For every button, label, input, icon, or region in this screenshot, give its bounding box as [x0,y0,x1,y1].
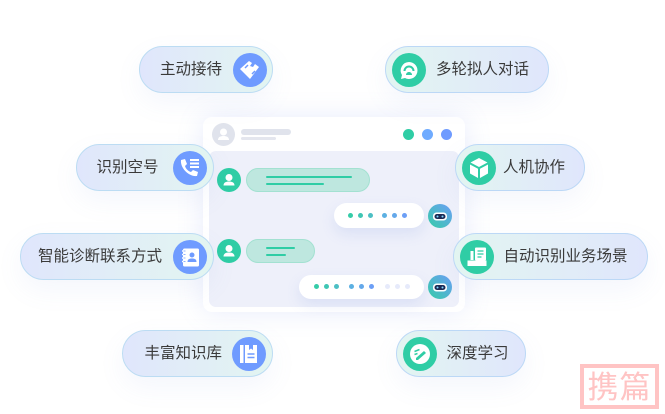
chat window [203,117,465,312]
label: 主动接待 [160,61,222,78]
label: 自动识别业务场景 [504,248,628,265]
pill: 多轮拟人对话 [385,46,549,92]
icon: ticket [233,53,267,87]
user bubble 1 [246,168,370,192]
icon: cube [462,151,496,185]
icon: chat agent [392,53,426,87]
user avatar 1 [217,168,241,192]
icon: notebook [232,337,266,371]
bot bubble 2 [299,274,424,299]
icon: document tray [460,240,494,274]
pill: 识别空号 [76,144,214,190]
pill: 深度学习 [396,330,526,376]
pill: 自动识别业务场景 [453,233,648,280]
stamp text: 携篇 [588,370,652,405]
chat panel [209,151,459,307]
label: 多轮拟人对话 [436,61,529,78]
pill: 人机协作 [455,144,585,190]
pill: 丰富知识库 [122,330,273,376]
header name lines [241,129,291,140]
label: 识别空号 [96,159,159,176]
label: 智能诊断联系方式 [38,248,162,265]
icon: phone list [173,151,207,185]
label: 人机协作 [503,159,565,176]
label: 丰富知识库 [144,345,222,362]
pill: 智能诊断联系方式 [20,233,214,280]
icon: contact book [173,240,207,274]
bot bubble 1 [334,203,424,228]
header avatar [212,123,235,146]
window control dots [403,129,452,140]
robot avatar 2 [428,275,452,299]
label: 深度学习 [446,345,509,362]
user bubble 2 [246,239,314,263]
icon: pencil note [403,337,437,371]
robot avatar 1 [428,204,452,228]
user avatar 2 [217,239,241,263]
watermark stamp [580,364,659,409]
pill: 主动接待 [139,46,273,92]
